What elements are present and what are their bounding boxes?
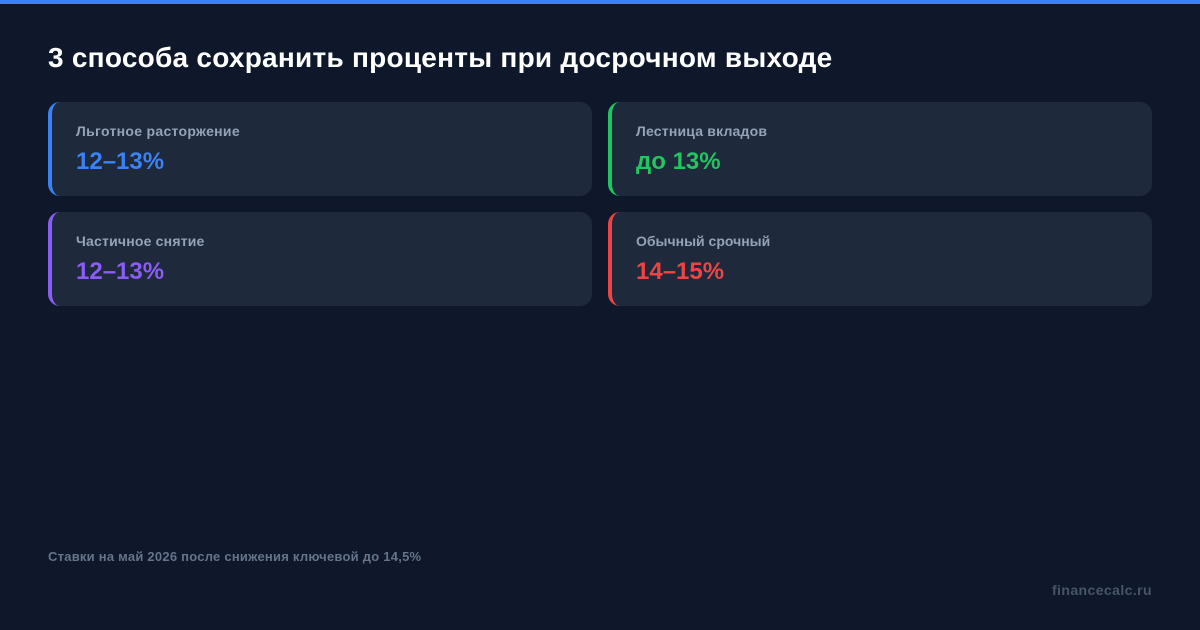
source: financecalc.ru	[1052, 582, 1152, 598]
label: Частичное снятие	[76, 233, 205, 249]
label: Обычный срочный	[636, 233, 770, 249]
panel: льготное расторжение	[48, 102, 592, 196]
value: 12–13%	[76, 148, 164, 175]
footnote: Ставки на май 2026 после снижения ключевой до 14,5%	[48, 549, 421, 564]
top accent bar	[0, 0, 1200, 4]
panel: частичное снятие	[48, 212, 592, 306]
title: 3 способа сохранить проценты при досрочном выходе	[48, 42, 832, 73]
panel: обычный срочный	[608, 212, 1152, 306]
value: 14–15%	[636, 258, 724, 285]
label: Лестница вкладов	[636, 123, 767, 139]
panel: лестница вкладов	[608, 102, 1152, 196]
label: Льготное расторжение	[76, 123, 240, 139]
value: до 13%	[636, 148, 721, 175]
value: 12–13%	[76, 258, 164, 285]
